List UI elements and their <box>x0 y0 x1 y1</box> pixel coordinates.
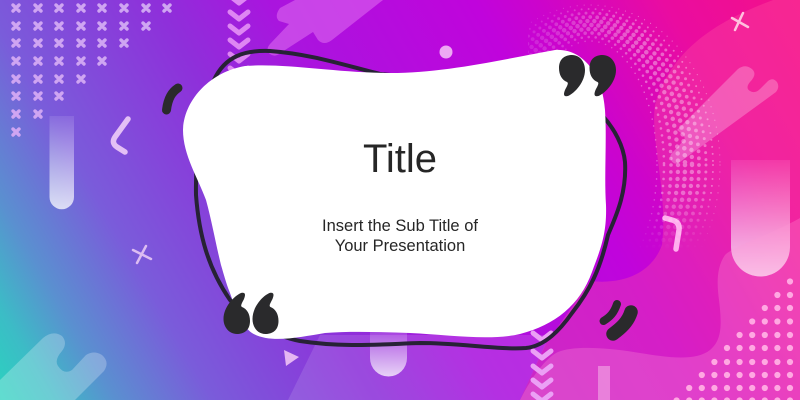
fading bar: left <box>50 116 74 209</box>
fading bar: bottom centre <box>370 330 407 377</box>
chevron column: top <box>230 0 248 75</box>
rounded stripes: top right <box>670 66 778 164</box>
dot: top centre <box>440 46 452 58</box>
background wave: lower right pink <box>520 218 800 400</box>
subtitle: Your Presentation <box>335 237 465 255</box>
angle mark: left <box>113 119 128 152</box>
title: Title <box>363 137 437 181</box>
subtitle: Insert the Sub Title of <box>322 217 478 235</box>
cross: left <box>133 246 151 263</box>
dash marks: bottom right <box>604 304 631 334</box>
dark outline blob <box>196 51 625 348</box>
rounded stripes: top centre <box>268 0 383 56</box>
cross: top right <box>732 13 748 30</box>
dash mark: left <box>166 88 178 110</box>
angle mark: right <box>665 218 679 249</box>
fading bar: bottom right <box>598 366 610 400</box>
subtitle <box>322 217 478 255</box>
background blob: right pink overlay <box>520 0 800 400</box>
background wave: bottom centre lilac <box>288 335 550 400</box>
triangle: bottom <box>284 350 299 366</box>
fading bar: right <box>731 160 790 276</box>
dot grid: bottom right <box>676 282 790 400</box>
cross grid: top left <box>13 5 170 135</box>
quote mark: bottom left <box>224 293 278 334</box>
white blob panel <box>183 50 606 339</box>
quote mark: top right <box>559 55 616 96</box>
halftone arc: top right <box>528 4 720 242</box>
rounded stripes: bottom left <box>0 333 107 400</box>
chevron column: bottom <box>533 333 551 400</box>
